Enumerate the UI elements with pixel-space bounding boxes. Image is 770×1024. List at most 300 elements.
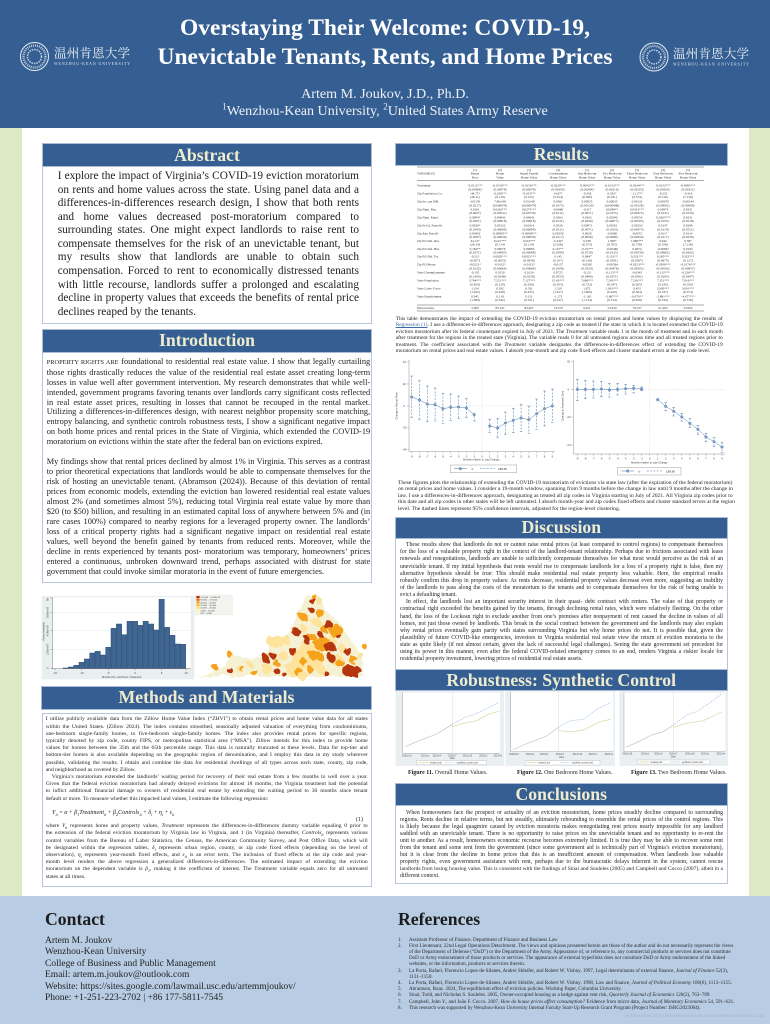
table: regression results: 0.285*** <box>657 255 670 259</box>
chart: home value event study: 9 <box>721 456 723 460</box>
text: abstract: and home values decreased post-moratorium compared to <box>58 211 359 223</box>
chart: home value event study: .02 <box>566 360 571 364</box>
table: regression results: 0.00122 <box>495 224 506 228</box>
chart: rental price event study: 0 <box>403 404 405 408</box>
table: regression results: 23,042 <box>683 306 693 311</box>
table: regression results: Zip Population: Lo. <box>417 191 443 195</box>
table: regression results: 0.145 <box>554 255 562 259</box>
map: Virginia choropleth with legend: 171,500 – 2,426,876 <box>200 597 221 599</box>
chart: home value event study: -9 <box>576 456 579 460</box>
table: regression results: (0.857) <box>470 258 480 262</box>
table: regression results: (0.0056) <box>523 258 535 262</box>
table: regression results: -0.226*** <box>681 271 695 275</box>
text: discussion: evict a defaulting tenant. <box>400 592 457 598</box>
text: methods first part: values for homes between the 35th and the 65th percentile range. This data is naturally truncated at these levels. Data for top-tier and <box>46 745 368 751</box>
chart: home value event study: -8 <box>584 456 587 460</box>
table: regression results: -0.0150 <box>470 200 480 204</box>
chart: rental price event study: .04 <box>402 360 406 364</box>
table: regression results: (0.00105) <box>631 188 643 192</box>
chart: home value event study: -4 <box>616 456 619 460</box>
table: regression results: (0.00090) <box>682 204 694 208</box>
table: regression results: -0.00070 <box>657 200 669 204</box>
text: introduction: government that could invoke similar moratoria in the event of future emergencies. <box>47 567 324 576</box>
table: regression results: State Labor Force <box>417 286 441 290</box>
text: abstract: declines reaped by the tenants. <box>58 306 196 318</box>
chart: figure 13 synthetic control two bedroom home values <box>619 691 728 766</box>
table: regression results: 13,579 <box>553 306 563 311</box>
table: regression results: -0.00564 <box>606 263 618 267</box>
chart: figure 11 synthetic control overall home values: synthetic control unit <box>457 762 478 765</box>
table: regression results: -0.0152*** <box>655 184 671 188</box>
text: introduction: almost 2% (and sometimes almost 5%), reducing total Virginia real estate value by more than <box>47 497 370 506</box>
histogram: months pre and post treatment: 0 <box>45 667 49 669</box>
text: figure caption: this date and all zip codes in other states will be left untreated. I absorb month-year and zip codes fixed effects and cluster standard errors at the region <box>398 499 735 505</box>
table: regression results: 0.0289** <box>606 207 619 211</box>
text: introduction: intended, government programs favoring tenants over landlords carry significant costs reflected <box>47 388 370 397</box>
text: figure caption: on rental prices and home values. I consider a 19-month window, spanning from 9 months before the change in law until 9 months after the change in <box>398 486 733 492</box>
histogram: months pre and post treatment: 8e <box>45 597 49 601</box>
table: regression results: 0.00132 <box>632 200 643 204</box>
table: regression results: 0.00256 <box>553 231 564 235</box>
chart: rental price event study: Months relative to Law Change <box>463 458 500 462</box>
text: First Lieutenant, 22nd Legal Operations Detachment. The views and opinions presented herein are those of the author and do not necessarily represent the views <box>409 943 733 949</box>
text: methods first part: one-bedroom single-family homes, to five-bedroom single-family homes. The index also provides rental prices for specific regions, <box>46 731 368 737</box>
equation number: (1) <box>356 817 363 823</box>
chart: figure 11 synthetic control overall home values: 2021m1 <box>421 755 430 757</box>
text: discussion: homes, not just those owned by landlords. This break in the social contract between the government and the landlords may also explain <box>400 621 723 627</box>
table: regression results: 0.00071 <box>582 224 593 228</box>
table: regression results: 0.0147 <box>658 224 668 228</box>
table: regression results: 0.942 <box>659 239 667 243</box>
table: regression results: (0.516) <box>683 298 693 302</box>
chart: rental price event study: -7 <box>426 454 429 458</box>
heading: Abstract: Abstract <box>174 144 240 164</box>
text: methods first part: default or more. To measure whether this impacted land values, I estimate the following regression: <box>46 796 268 802</box>
table: regression results: (0.0571) <box>469 251 481 255</box>
table: regression results: -0.0265 <box>582 263 592 267</box>
table: regression results: 0.151 <box>525 294 533 298</box>
table: regression results: 0.0074 <box>632 247 642 251</box>
chart: figure 13 synthetic control two bedroom home values: 2022m1 <box>701 753 710 755</box>
table: regression results: 1.671 <box>583 286 591 290</box>
table: regression results: 53,634 <box>607 306 617 311</box>
table: regression results: 0.221*** <box>494 239 507 243</box>
authors and affiliations: Artem M. Joukov, J.D., Ph.D. <box>301 86 469 102</box>
table: regression results: 0.00290 <box>607 215 618 219</box>
table: regression results: (0.0211) <box>552 228 564 232</box>
text: conclusions <box>400 810 723 879</box>
table: regression results: (0.00088) <box>523 251 535 255</box>
table: regression results: Zip Inc. per HH. <box>417 200 439 204</box>
chart: rental price event study: 3 <box>505 454 507 458</box>
table: regression results: 0.0251 <box>683 207 693 211</box>
table: regression results: -0.0112* <box>494 263 506 267</box>
table: regression results: -0.215 <box>471 255 480 259</box>
text: Abramson, Boaz. 2024, The equilibrium effect of eviction policies. Working Paper, Columbia University. <box>409 986 622 992</box>
text: introduction: entered a continuous, unbroken downward trend, perhaps associated with distrust for state <box>47 557 370 566</box>
heading: Introduction <box>42 329 372 352</box>
chart: home value event study: -.02 <box>566 415 571 419</box>
text: discussion: for the loss of a valuable property right in the context of the landlord-tenant relationship. Perhaps due to frictions associated with lease <box>400 549 723 555</box>
chart: home value event study: LB/UB <box>666 469 675 473</box>
chart: figure 11 synthetic control overall home values: 2021m4 <box>432 755 442 757</box>
table: regression results: (0.723) <box>582 282 592 286</box>
chart: figure 13 synthetic control two bedroom home values: 2021m4 <box>654 753 663 755</box>
table: regression results: Zip Num. Bus. <box>417 207 437 211</box>
text: methods first part: typically denoted by zip code, county FIPS, or metropolitan statistical area (“MSA”). Zillow intends for this index to provide home <box>46 738 368 744</box>
table: regression results: 0.0117 <box>659 231 668 235</box>
table: regression results: -0.317 <box>583 207 592 211</box>
text: contact details: Website: https://sites.google.com/lawmail.usc.edu/artemmjoukov/ <box>45 982 296 992</box>
table: regression results: -0.0223*** <box>629 263 645 267</box>
table: regression results: (2.018) <box>553 243 563 247</box>
heading: Methods and Materials: Methods and Materials <box>119 687 294 707</box>
chart: figure 11 synthetic control overall home values: treated unit <box>430 762 442 765</box>
table: regression results: 0.0036* <box>470 224 481 228</box>
table: regression results: 0.00842 <box>495 215 506 219</box>
table: regression results: Price <box>472 176 479 180</box>
table: regression results: 0.322*** <box>682 255 695 259</box>
table: regression results: 0.0026 <box>582 231 592 235</box>
authors and affiliations <box>222 86 548 119</box>
text: discussion <box>400 542 723 662</box>
text: discussion: These results show that landlords do not or cannot raise rental prices (at least compared to control regions) to compensate themselves <box>406 542 723 548</box>
table: regression results: -0.0221* <box>469 263 481 267</box>
table: regression results: -0.00847 <box>657 247 669 251</box>
table: regression results: (0.00591) <box>631 266 643 270</box>
table: regression results: (0.00475) <box>631 228 643 232</box>
table: regression results: -0.0345 <box>632 271 642 275</box>
text: introduction: PROPERTY RIGHTS ARE foundational to residential real estate value. I show that legally curtailing <box>47 357 370 366</box>
text: discussion: renewals and renegotiations, landlords are unable to sufficiently compensate themselves for what most would perceive as the risk of an <box>400 556 723 562</box>
table: regression results <box>417 167 704 311</box>
chart: rental price event study: 9 <box>552 454 554 458</box>
logo: Wenzhou-Kean University right: WENZHOU-KEAN UNIVERSITY <box>673 62 749 66</box>
table: regression results: (0.0080) <box>606 235 618 239</box>
table: regression results: (0.0561) <box>631 274 643 278</box>
text: methods second part <box>46 823 368 880</box>
table: regression results: 0.232*** <box>631 255 644 259</box>
table: regression results: 83,547 <box>495 306 505 311</box>
table: regression results: (0.0111) <box>552 211 564 215</box>
table: regression results: (0.00345) <box>552 188 564 192</box>
table: regression results: (1.032) <box>470 290 480 294</box>
text: methods second part: the extension of the federal eviction moratorium by Virginia law in Virginia, and 1 (in Virginia) thereafter, Controlsit represents various <box>46 830 368 837</box>
heading: Abstract <box>42 143 372 167</box>
chart: figure 11 synthetic control overall home values: 2022m4 <box>493 755 503 757</box>
authors and affiliations: 1Wenzhou-Kean University, 2United States Army Reserve <box>222 101 548 119</box>
table: regression results: 0.0361 <box>553 200 563 204</box>
table: regression results: -0.253 <box>659 191 668 195</box>
heading: Results: Results <box>534 144 589 164</box>
text: reference list: 5. <box>398 986 402 992</box>
text: discussion: robustly confirm this drop in property values: As rents decrease, residential property values decrease even more, suggesting an inability <box>400 578 723 584</box>
map: Virginia choropleth with legend: 45,000 – 92,000 <box>200 602 217 604</box>
chart: rental price event study: 5 <box>520 454 522 458</box>
table: regression results: (0.00937) <box>682 266 694 270</box>
table: regression results: 0.00035 <box>607 200 618 204</box>
table: regression results: 0.216*** <box>523 239 536 243</box>
table: regression results: (0.0591) <box>606 258 618 262</box>
table: regression results: (0.655) <box>553 282 563 286</box>
text: introduction: in real estate asset prices, resulting in losses that cannot be recouped in the rental market. <box>47 398 370 406</box>
text: introduction: those rights drastically reduces the value of the residential real estate asset creating long-term <box>47 368 370 377</box>
text: introduction: to prior theoretical expectations that landlords would be able to compensate themselves for the <box>47 467 370 476</box>
chart: home value event study: 5 <box>689 456 691 460</box>
table: regression results: -0.316 <box>684 191 693 195</box>
table: regression results: (0.0117) <box>552 235 564 239</box>
table: regression results: (0.00464) <box>469 188 481 192</box>
table: regression results: 7.686*** <box>581 279 594 283</box>
table: regression results: -0.670** <box>631 294 643 298</box>
chart: figure 12 synthetic control one bedroom home values: 2021m7 <box>556 754 565 756</box>
text: conclusions: is likely because the legal quagmire caused by eviction moratoria makes renegotiating rent prices nearly impossible for any landlord <box>400 824 723 830</box>
table: regression results: 0.331 <box>525 286 533 290</box>
chart: rental price event study: -5 <box>442 454 445 458</box>
table: regression results: (0.00216) <box>606 188 618 192</box>
text: abstract: compensation. Forced to rent to economically distressed tenants <box>58 265 359 277</box>
text: of the Department of Defense (“DoD”) or the Department of the Army. Appearance of, or reference to, any commercial products or services does not constitute <box>409 949 731 955</box>
table: regression results: 0.00974 <box>658 207 669 211</box>
text: figure caption <box>398 480 735 512</box>
text: introduction: on both home prices and rental prices in the State of Virginia, which extended the COVID-19 <box>47 427 370 436</box>
table: regression results: (0.00059) <box>494 235 506 239</box>
table: regression results: (7.156) <box>683 195 693 199</box>
map: Virginia choropleth with legend: 92,000 – 171,500 <box>200 600 218 602</box>
text: conclusions: but it is clear from the decline in home prices that this is an insufficient amount of compensation. When landlords lose valuable <box>400 852 723 858</box>
text: methods first part: to inflict additional financial damage to owners of residential real estate by extending the waiting period to 30 months since tenant <box>46 788 368 794</box>
table: regression results: Zip Ann Payroll <box>417 231 438 235</box>
table: regression results: (0.0295) <box>657 274 669 278</box>
text: 1131–1150. <box>409 974 433 980</box>
text: introduction: prices from economic models, extending the eviction ban lowered residential real estate values <box>47 487 370 496</box>
text: reference list: 6. <box>398 992 402 998</box>
text: results table description: This table demonstrates the impact of extending the COVID-19 eviction moratorium on rental prices and home values by displaying the results of <box>396 316 723 322</box>
chart: rental price event study: -6 <box>434 454 437 458</box>
table: regression results: 0.0020*** <box>493 255 507 259</box>
table: regression results: Home Value <box>521 176 538 180</box>
table: regression results: -0.157** <box>581 247 593 251</box>
table: regression results: 44.13* <box>470 239 480 243</box>
table: regression results: 7.251*** <box>494 279 507 283</box>
table: regression results: (0.107) <box>553 258 563 262</box>
table: regression results: (0.00085) <box>494 251 506 255</box>
table: regression results: Home Value <box>550 176 567 180</box>
text: methods first part: Given that the federal eviction moratorium had already delayed evictions for almost 18 months, the Virginia treatment had the potential <box>46 781 368 787</box>
table: regression results: Rental <box>471 172 479 176</box>
chart: home value event study: -5 <box>608 456 611 460</box>
table: regression results: 0.00083 <box>524 247 535 251</box>
table: regression results: 0.0847 <box>582 255 592 259</box>
table: regression results: (0.0324) <box>581 266 593 270</box>
chart: rental price event study: 7 <box>536 454 538 458</box>
table: regression results: -0.0112*** <box>468 184 483 188</box>
table: regression results: 1.314 <box>471 286 479 290</box>
histogram: months pre and post treatment: 10 <box>185 671 188 675</box>
chart: figure 13 synthetic control two bedroom home values: synthetic control unit <box>682 761 703 764</box>
table: regression results: Home Value <box>629 176 646 180</box>
table: regression results: (0.2043) <box>469 228 481 232</box>
table: regression results: 0.0326 <box>553 224 563 228</box>
table: regression results: (7.158) <box>683 243 693 247</box>
table: regression results: (0.00078) <box>494 188 506 192</box>
table: regression results: (0.558) <box>658 243 668 247</box>
table: regression results: (0.00450) <box>631 235 643 239</box>
equation: regression: Yit = α + β1Treatmentit + β2Controlsit + δi + ηt + εit <box>52 809 174 817</box>
table: regression results: (0.00091) <box>657 204 669 208</box>
histogram: months pre and post treatment: Months Pre- and Post- Treatment <box>102 675 142 679</box>
chart: rental price event study: -1 <box>473 454 476 458</box>
table: regression results: (0.0056) <box>581 235 593 239</box>
table: regression results: Zip Est Q. Payrolls <box>417 224 443 228</box>
heading: Conclusions: Conclusions <box>516 784 607 804</box>
table: regression results: 0.132** <box>607 255 618 259</box>
table: regression results: Condominium <box>548 172 568 176</box>
text: websites, or the information, products or services therein. <box>409 961 525 967</box>
table: regression results: (0.00862) <box>657 251 669 255</box>
table: regression results: (0.0156) <box>682 211 694 215</box>
chart: figure 11 synthetic control overall home values: Date <box>450 757 455 760</box>
table: regression results: 14.67* <box>553 191 563 195</box>
text: conclusions: unit to another. As a result, homeowners economic recourse becomes extremely limited. It is true they may be able to recover some rent <box>400 838 723 844</box>
text: methods second part: be designated within the regression tables, δi represents urban region, county, or zip code fixed effects (depending on the level of <box>46 845 368 852</box>
text: introduction: $20 (to $50) billion, and resulting in an estimated capital loss of anywhere between 5% and (in <box>47 507 370 516</box>
chart: figure 12 synthetic control one bedroom home values: treated unit <box>538 762 550 765</box>
text: methods first part: within the United States. (Zillow 2024). The index contains smoothed, seasonally adjusted valuation of everything from condominiums, <box>46 724 368 730</box>
text: introduction: loss of a critical property rights had a significant negative impact on residential real estate <box>47 527 370 536</box>
table: regression results: (5.914) <box>553 195 563 199</box>
heading: Robustness: Synthetic Control <box>395 669 728 691</box>
table: regression results: Value <box>496 176 504 180</box>
table: regression results: 0.00076 <box>495 247 506 251</box>
table: regression results: (0.521) <box>524 298 534 302</box>
background: right green margin <box>749 128 770 896</box>
table: regression results: (0.917) <box>553 298 563 302</box>
text: contact details: Email: artem.m.joukov@outlook.com <box>45 970 189 980</box>
table: regression results: (0.00756) <box>523 211 535 215</box>
logo: Wenzhou-Kean University left: WENZHOU-KEAN UNIVERSITY <box>54 62 130 66</box>
text: contact details: Artem M. Joukov <box>45 936 112 946</box>
table: regression results: 0.0124 <box>524 271 534 275</box>
table: regression results: (0.00059) <box>523 235 535 239</box>
table: regression results: (0.00094) <box>523 228 535 232</box>
chart: home value event study: b <box>639 469 641 473</box>
table: regression results: (0.00203) <box>657 188 669 192</box>
text: discussion: of the landlords to pass along the costs of the moratorium to the tenants and to compensate themselves for the risk of being unable to <box>400 585 723 591</box>
table: regression results: (0.00664) <box>523 266 535 270</box>
text: conclusions: property rights, even government assistance with rent, perhaps due to the bureaucratic delays inherent in the system, cannot rescue <box>400 859 723 865</box>
text: abstract: compensate themselves for the risk of an unevictable tenant, but <box>58 238 359 250</box>
table: regression results: (0.0436) <box>581 219 593 223</box>
heading: Methods and Materials <box>41 686 372 710</box>
chart: figure 12 synthetic control one bedroom home values: Date <box>559 756 565 759</box>
chart: rental price event study: 0 <box>481 454 483 458</box>
table: regression results: -0.0072 <box>632 231 642 235</box>
table: regression results: (0.0217) <box>469 204 481 208</box>
chart: rental price event study: -3 <box>457 454 460 458</box>
table: regression results: (0.0103) <box>657 219 669 223</box>
table: regression results: (0.0590) <box>552 251 564 255</box>
table: regression results: 0.00554 <box>632 215 643 219</box>
table: regression results: (0.114) <box>524 243 534 247</box>
chart: rental price event study: LB/UB <box>498 467 507 471</box>
chart: figure 13 synthetic control two bedroom home values: 2021m10 <box>685 753 696 755</box>
table: regression results: (1) <box>473 168 477 172</box>
table: regression results: 0.0904* <box>470 215 481 219</box>
table: regression results: 0.184** <box>470 247 481 251</box>
table: regression results: (0.0110) <box>657 228 669 232</box>
table: regression results: (0.435) <box>524 290 534 294</box>
table: regression results: 61,265 <box>658 306 668 311</box>
text: discussion: plausibility of future COVID-like emergencies, investors in Virginia residential real estate view the return of eviction moratoria to the <box>400 635 723 641</box>
table: regression results: (0.00818) <box>523 219 535 223</box>
table: regression results: -0.121 <box>583 271 592 275</box>
chart: home value event study: -3 <box>624 456 627 460</box>
chart: home value event study: -6 <box>600 456 603 460</box>
table: regression results: Home Value <box>680 176 697 180</box>
text: methods first part: and neighborhood as covered by Zillow. <box>46 767 136 773</box>
text: conclusions: from the tenant and some rent from the government (since some government aid is technically part of Virginia’s eviction moratorium), <box>400 845 723 851</box>
table: regression results: (0.537) <box>658 290 668 294</box>
text: abstract: with little recourse, landlords suffer a prolonged and escalating <box>58 278 359 290</box>
table: regression results: -0.115*** <box>605 271 619 275</box>
table: regression results: (1.134) <box>582 298 592 302</box>
table: regression results: 0.0273*** <box>522 207 536 211</box>
table: regression results: Single Family <box>520 172 539 176</box>
table: regression results: 3.001*** <box>682 286 695 290</box>
table: regression results: 7.243*** <box>606 279 619 283</box>
text: results table description <box>396 316 723 354</box>
table: regression results: One Bedroom <box>578 172 597 176</box>
table: regression results: (0.0567) <box>469 219 481 223</box>
table: regression results: 0.0193 <box>683 247 693 251</box>
caption: figure 11: Figure 11. Overall Home Values. <box>408 770 487 776</box>
table: regression results: 15.43*** <box>552 279 565 283</box>
table: regression results: 0.00114 <box>524 224 535 228</box>
text: discussion: unevictable tenant. If my initial hypothesis that rents would rise to compensate landlords for a loss of a property right is false, then my <box>400 564 723 570</box>
text: template credit: POSTER TEMPLATE BY GENIGRAPHICS® 1.800.790.4001 WWW.GENIGRAPHICS.COM <box>626 1014 764 1018</box>
table: regression results: -0.105 <box>471 271 480 275</box>
table: regression results: 7.351*** <box>657 279 670 283</box>
table: regression results: (0.396) <box>582 195 592 199</box>
logo: Wenzhou-Kean University right <box>640 42 749 72</box>
table: regression results: (0.0071) <box>581 228 593 232</box>
chart: figure 12 synthetic control one bedroom home values: 2021m4 <box>540 754 549 756</box>
table: regression results: -2.667*** <box>605 294 619 298</box>
text: introduction: entropy balancing, and synthetic controls robustness tests, I show a significant negative impact <box>47 417 370 426</box>
table: regression results: 0.0101 <box>470 207 480 211</box>
table: regression results: (0.0375) <box>552 204 564 208</box>
table: regression results: (0.765) <box>607 243 617 247</box>
table: regression results: -0.00144 <box>682 200 694 204</box>
text: methods first part: I utilize publicly available data from the Zillow Home Value Index (“ZHVI”) to obtain rental prices and home value data for all states <box>46 716 368 722</box>
text: results table description: Regression (1). I use a differences-in-differences approach, designating a zip code as treated if the state in which it is located extended the COVID-19 <box>396 322 723 328</box>
table: regression results: 9,251 <box>583 306 591 311</box>
chart: figure 11 synthetic control overall home values: 2020m10 <box>402 755 412 757</box>
chart: home value event study: 8 <box>713 456 715 460</box>
table: regression results: -0.103*** <box>522 191 536 195</box>
table: regression results: -4.477*** <box>681 294 695 298</box>
table: regression results: (3) <box>635 168 639 172</box>
table: regression results: -0.0112* <box>523 263 535 267</box>
table: regression results: (0.0521) <box>682 228 694 232</box>
table: regression results: 3.704*** <box>469 279 482 283</box>
chart: rental price event study: -2 <box>465 454 468 458</box>
chart: figure 12 synthetic control one bedroom home values <box>505 691 615 766</box>
table: regression results: (26.14) <box>470 243 480 247</box>
chart: home value event study: -.04 <box>566 443 571 447</box>
table: regression results: (1.000) <box>582 290 592 294</box>
